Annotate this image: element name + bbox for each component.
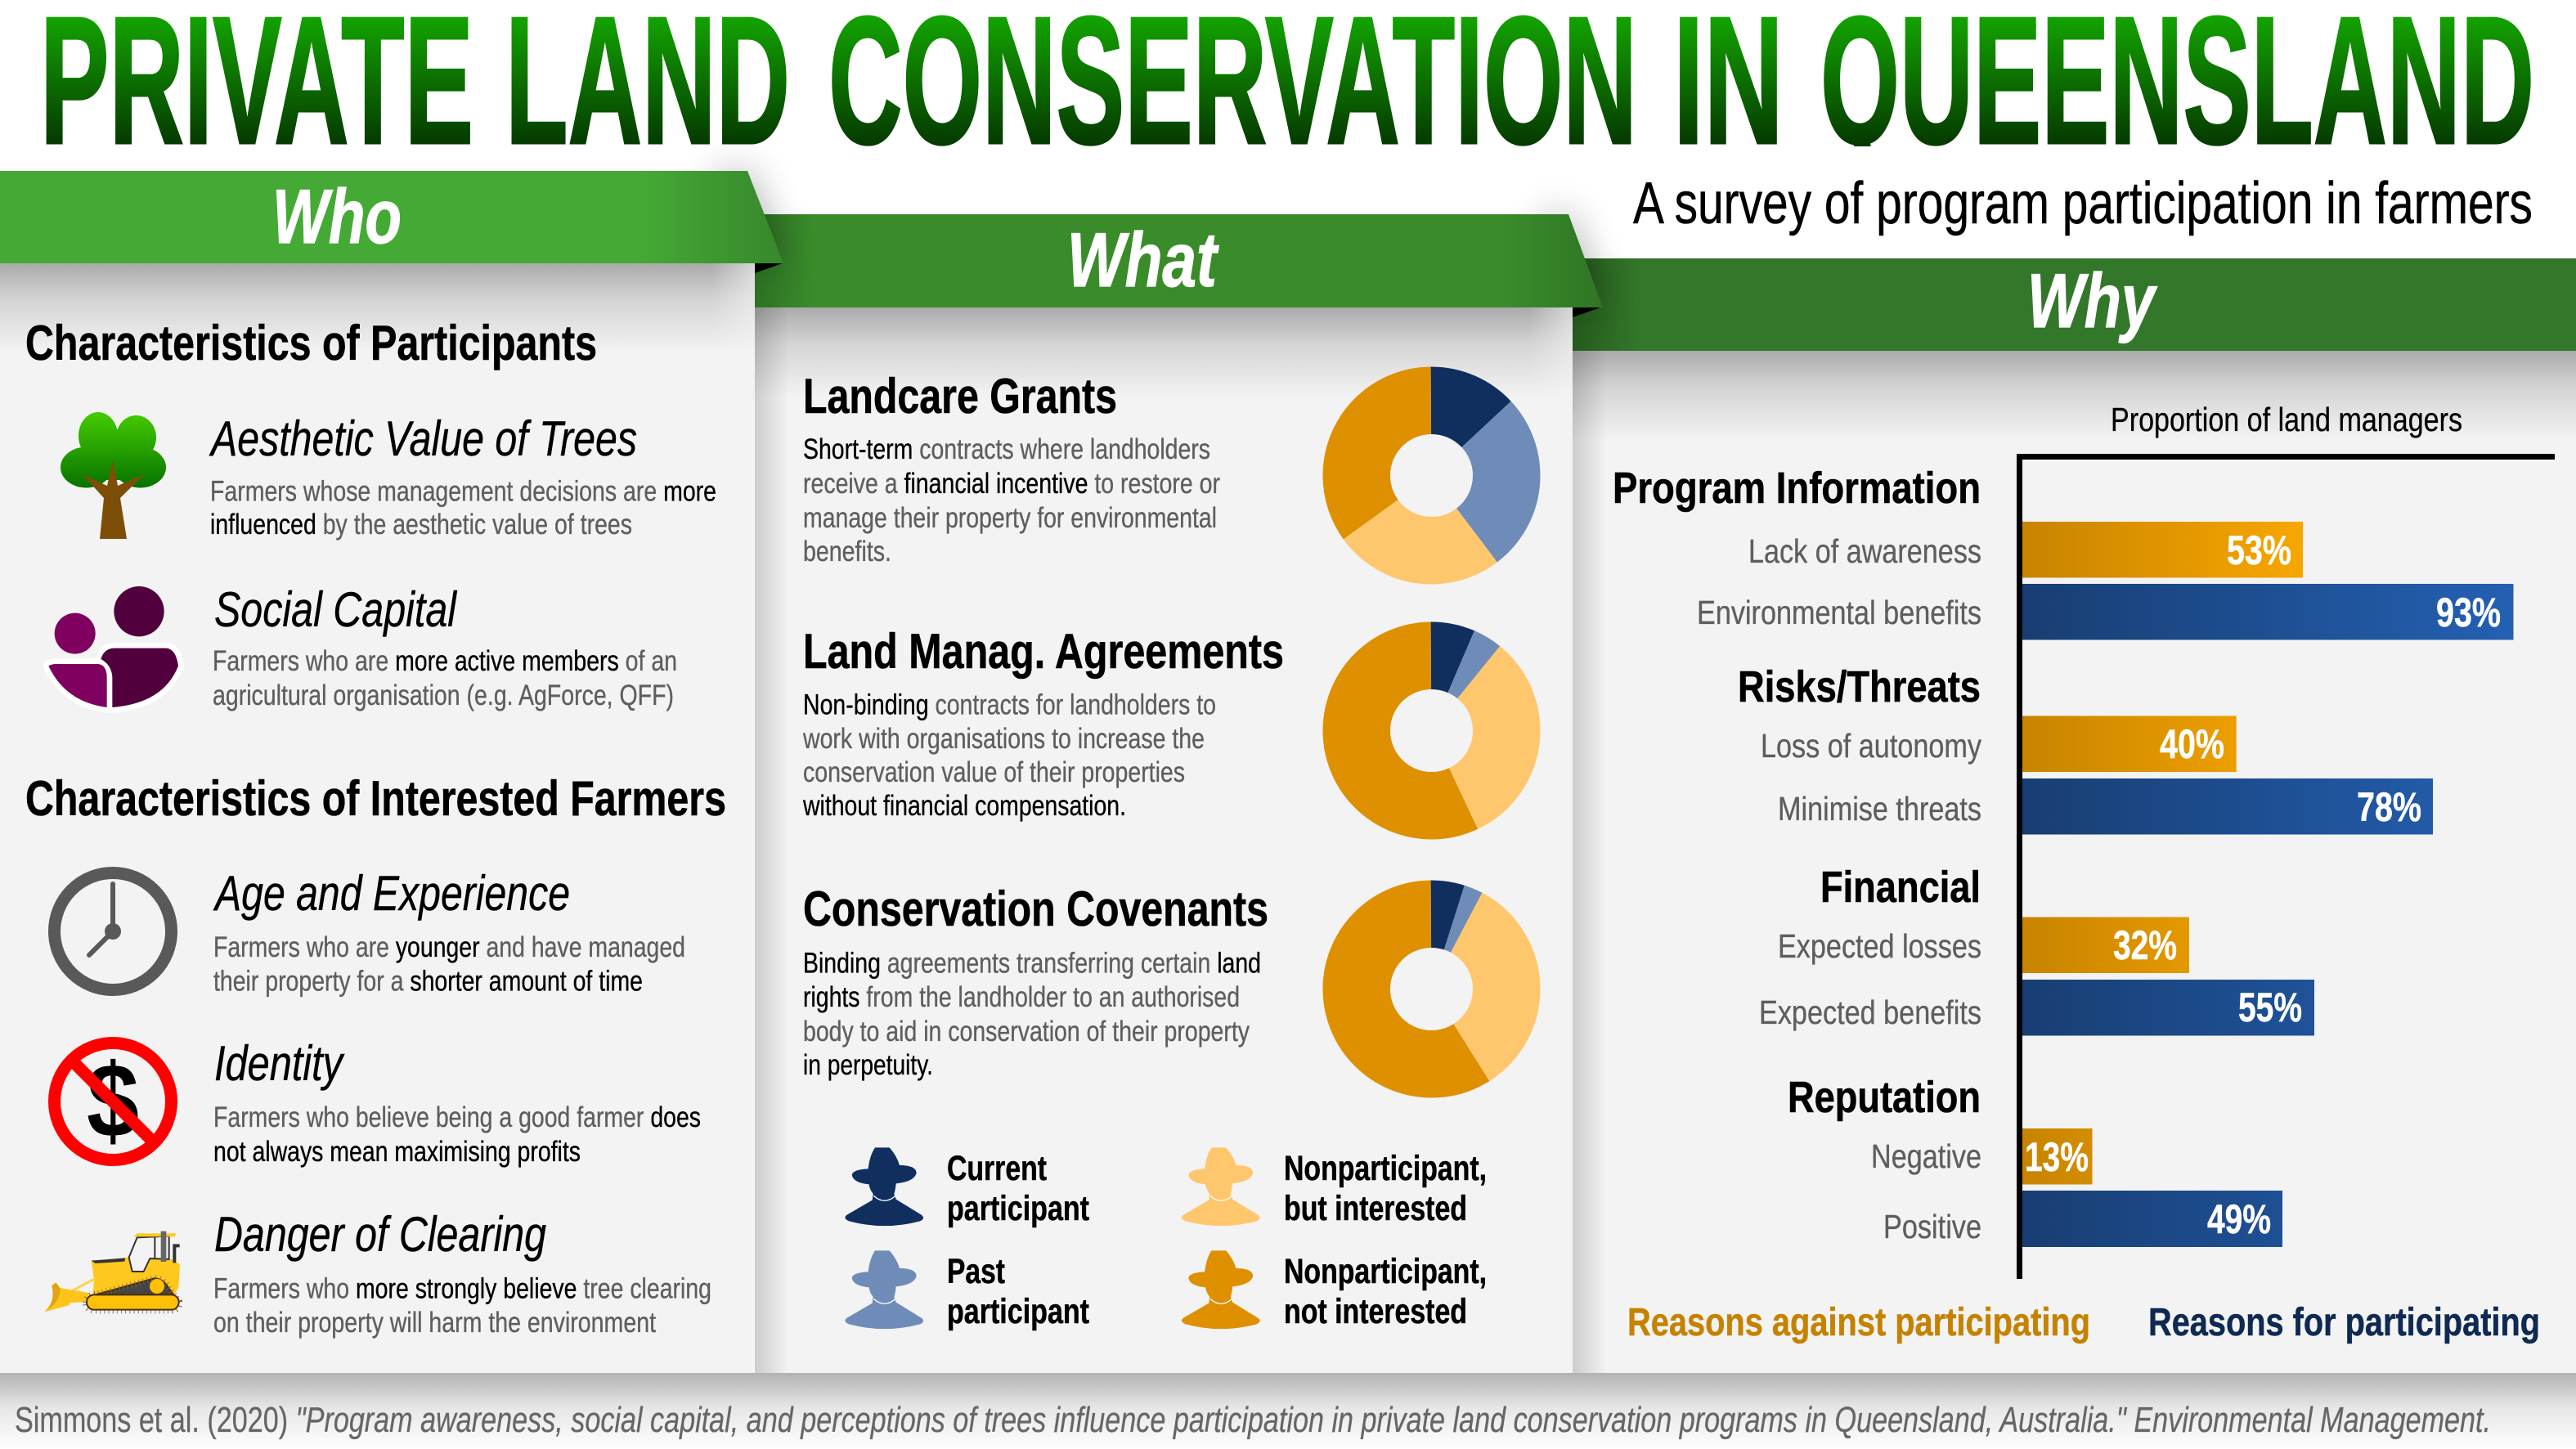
item: age and experience: their property for a shorter amount of time: [213, 965, 643, 998]
item: aesthetic value of trees: Farmers whose management decisions are more: [210, 476, 716, 507]
category labels: Loss of autonomy: [1761, 727, 1981, 765]
icon: clock: [54, 873, 172, 989]
category labels: Financial: [1820, 863, 1981, 912]
legend: past participant: [845, 1250, 1089, 1331]
what ribbon: [755, 214, 1603, 307]
donut: land management agreements: [1357, 656, 1506, 805]
legend: nonparticipant, but interested: [1182, 1147, 1487, 1228]
why ribbon: [1573, 258, 2576, 351]
category labels: Program Information: [1613, 464, 1981, 513]
conservation covenants text: body to aid in conservation of their property: [803, 1016, 1250, 1047]
bar chart: 13%: [2025, 1134, 2089, 1180]
item: danger of clearing: on their property will harm the environment: [213, 1307, 656, 1339]
legend: past participant: Past: [947, 1252, 1005, 1291]
icon: tree: [61, 412, 166, 539]
title: [46, 15, 2531, 146]
panel: why: [1573, 258, 2576, 1373]
bar chart: 55%: [2238, 985, 2302, 1030]
heading: characteristics of participants: Characteristics of Participants: [25, 316, 597, 370]
item: danger of clearing: Farmers who more strongly believe tree clearing: [213, 1272, 711, 1305]
icon: no dollar sign: [54, 1043, 172, 1160]
category labels: Expected benefits: [1759, 994, 1981, 1031]
landcare grants heading: Landcare Grants: [803, 369, 1117, 424]
what heading: What: [1067, 217, 1219, 303]
bar chart: 32%: [2113, 922, 2177, 968]
conservation covenants text: in perpetuity.: [803, 1049, 933, 1081]
icon: no dollar sign: $: [87, 1043, 139, 1160]
land management agreements text: Non-binding contracts for landholders to: [803, 689, 1216, 721]
category labels: Risks/Threats: [1738, 662, 1981, 711]
conservation covenants heading: Conservation Covenants: [803, 882, 1268, 936]
legend: current participant: participant: [947, 1189, 1089, 1228]
landcare grants text: Short-term contracts where landholders: [803, 433, 1210, 465]
icon: social capital people: [48, 586, 178, 707]
item: aesthetic value of trees: [209, 411, 716, 541]
bar chart: 78%: [2357, 784, 2421, 830]
item: age and experience: [213, 866, 685, 998]
landcare grants text: receive a financial incentive to restore or: [803, 468, 1220, 500]
conservation covenants text: Binding agreements transferring certain land: [803, 947, 1261, 980]
item: aesthetic value of trees: influenced by the aesthetic value of trees: [210, 509, 632, 541]
item: social capital: agricultural organisation (e.g. AgForce, QFF): [213, 680, 674, 711]
bar chart: [2020, 456, 2555, 1279]
category labels: Minimise threats: [1778, 790, 1981, 828]
legend: nonparticipant, but interested: but interested: [1284, 1189, 1467, 1228]
landcare grants text: [803, 433, 1220, 567]
item: age and experience: Farmers who are younger and have managed: [213, 931, 685, 963]
item: danger of clearing: Danger of Clearing: [214, 1207, 546, 1262]
legend: nonparticipant, not interested: Nonparticipant,: [1284, 1252, 1487, 1291]
category labels: Environmental benefits: [1697, 594, 1981, 631]
axis title: Proportion of land managers: [2111, 401, 2462, 438]
category labels: Negative: [1871, 1137, 1981, 1175]
item: social capital: Social Capital: [214, 582, 457, 637]
category labels: Positive: [1883, 1208, 1981, 1245]
landcare grants text: benefits.: [803, 536, 891, 567]
donut: conservation covenants: [1357, 914, 1506, 1064]
item: identity: Identity: [214, 1036, 345, 1091]
bar chart: 93%: [2436, 590, 2501, 635]
item: identity: not always mean maximising profits: [213, 1136, 581, 1168]
legend: nonparticipant, but interested: Nonparticipant,: [1284, 1149, 1487, 1188]
panel: who: [0, 171, 783, 1373]
item: social capital: Farmers who are more active members of an: [213, 645, 677, 677]
icon: bulldozer: [44, 1231, 180, 1312]
land management agreements text: conservation value of their properties: [803, 756, 1185, 788]
legend: current participant: Current: [947, 1149, 1047, 1188]
heading: characteristics of interested farmers: Characteristics of Interested Farmers: [25, 771, 726, 826]
conservation covenants text: rights from the landholder to an authorised: [803, 981, 1240, 1013]
item: aesthetic value of trees: Aesthetic Value of Trees: [209, 411, 637, 466]
item: social capital: [213, 582, 677, 711]
land management agreements text: [802, 689, 1216, 822]
land management agreements text: work with organisations to increase the: [802, 723, 1205, 755]
legend: reasons against: Reasons against participating: [1627, 1301, 2090, 1344]
legend: nonparticipant, not interested: [1182, 1250, 1487, 1331]
category labels: Lack of awareness: [1748, 532, 1981, 570]
legend: current participant: [845, 1147, 1089, 1228]
landcare grants text: manage their property for environmental: [803, 502, 1217, 534]
category labels: Expected losses: [1778, 927, 1981, 965]
legend: nonparticipant, not interested: not interested: [1284, 1292, 1467, 1331]
panel: what: [755, 214, 1603, 1373]
category labels: Reputation: [1788, 1073, 1981, 1122]
item: identity: Farmers who believe being a good farmer does: [213, 1101, 701, 1133]
item: age and experience: Age and Experience: [213, 866, 570, 921]
bar chart: 49%: [2207, 1196, 2271, 1242]
footer shadow band: [0, 1373, 2576, 1449]
bar chart: 53%: [2227, 527, 2291, 573]
item: identity: [213, 1036, 701, 1168]
bar chart: 40%: [2160, 721, 2224, 767]
who ribbon: [0, 171, 783, 263]
category labels: [1613, 464, 1981, 1245]
who heading: Who: [272, 173, 402, 259]
land management agreements heading: Land Manag. Agreements: [803, 624, 1284, 679]
why heading: Why: [2027, 258, 2158, 343]
legend: past participant: participant: [947, 1292, 1089, 1331]
item: danger of clearing: [213, 1207, 711, 1339]
land management agreements text: without financial compensation.: [802, 790, 1126, 822]
donut: landcare grants: [1357, 401, 1506, 550]
conservation covenants text: [803, 947, 1261, 1081]
